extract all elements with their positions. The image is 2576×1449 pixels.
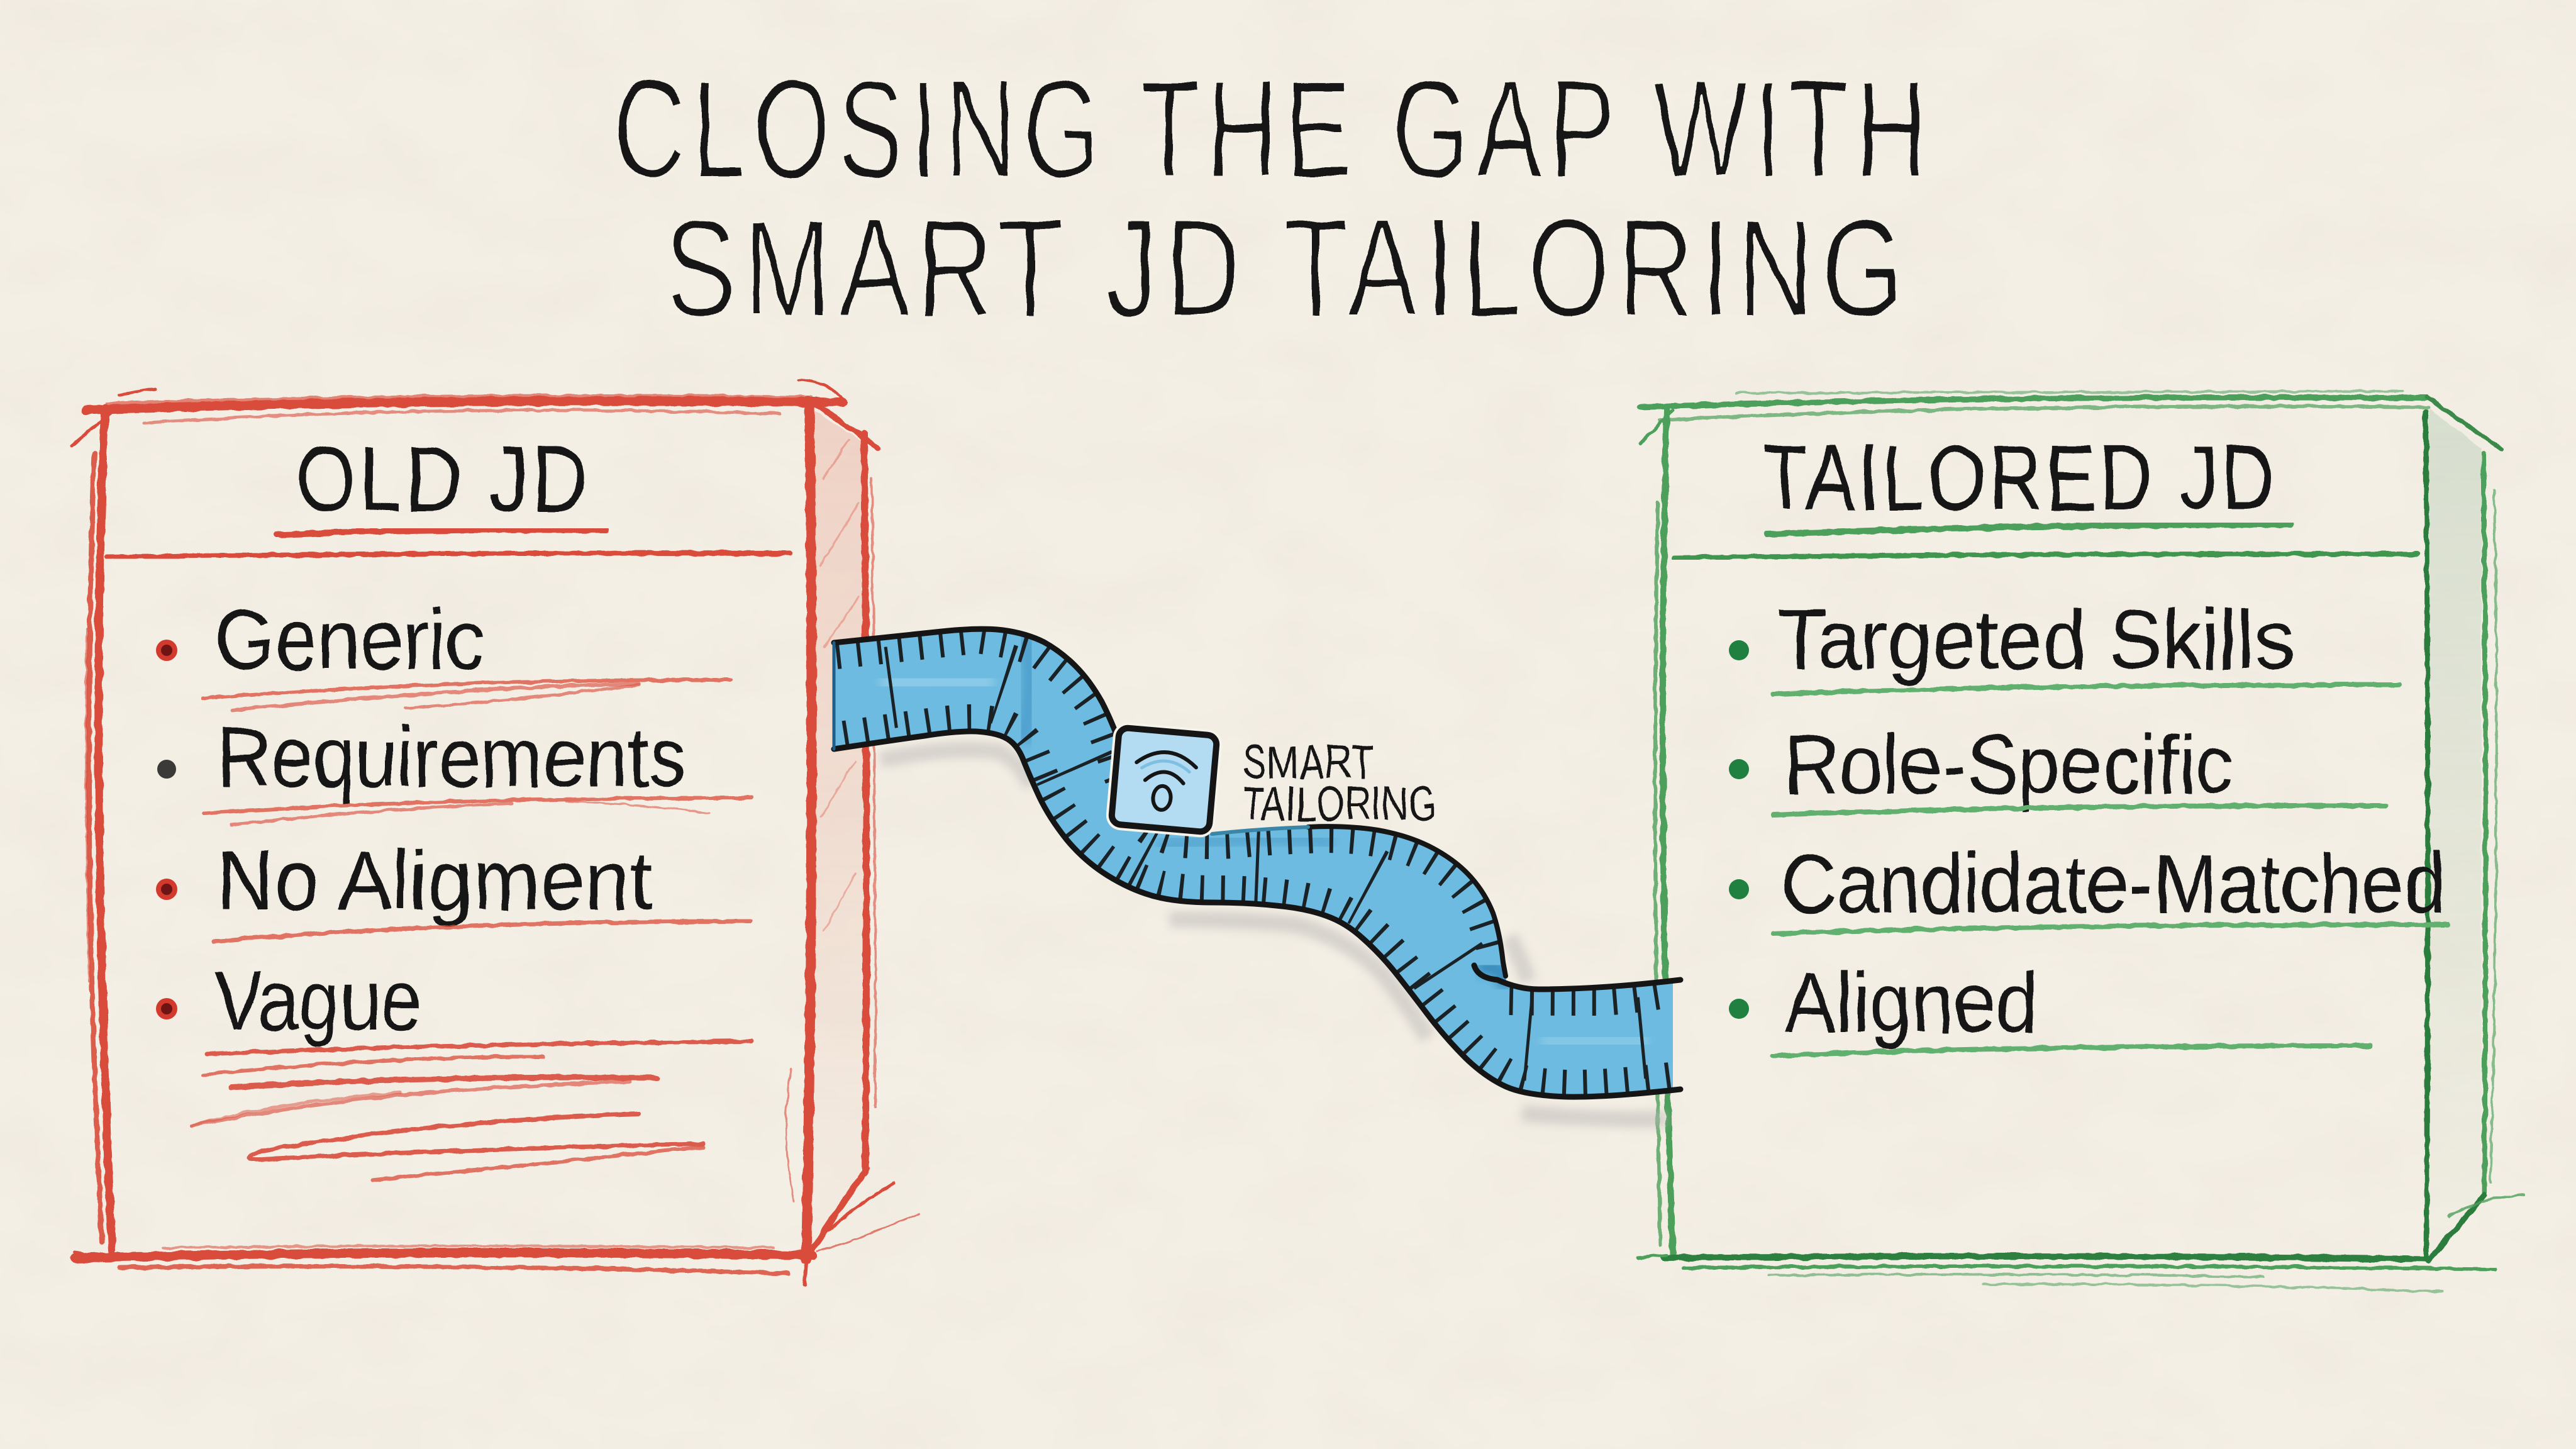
title: SMART JD TAILORING	[665, 190, 1911, 347]
red underlines and scribbles	[192, 680, 752, 1180]
tape measure connector	[834, 629, 1680, 1119]
green underlines	[1773, 685, 2448, 1056]
label: smart tailoring	[1241, 736, 1436, 831]
item: Generic: Generic	[215, 593, 484, 687]
list: old JD items	[156, 593, 686, 1048]
tape shading and ruler ticks	[836, 635, 1673, 1084]
tailored JD box sketch frame	[1638, 391, 2524, 1292]
item: Requirements: Requirements	[216, 711, 686, 804]
label: smart tailoring: TAILORING	[1241, 777, 1436, 831]
item: Candidate-Matched: Candidate-Matched	[1782, 837, 2446, 931]
heading: tailored JD: TAILORED JD	[1762, 426, 2278, 530]
tape body	[834, 629, 1673, 1097]
infographic canvas	[70, 79, 2526, 1294]
item: Aligned: Aligned	[1785, 956, 2038, 1050]
icon: smart tailoring wifi badge	[1105, 721, 1223, 838]
item: Role-Specific: Role-Specific	[1785, 718, 2233, 812]
label: smart tailoring: SMART	[1241, 736, 1375, 789]
item: Vague: Vague	[214, 954, 422, 1048]
item: No Aligment: No Aligment	[216, 834, 652, 928]
tape outline	[834, 629, 1680, 1097]
heading underline and divider	[1674, 525, 2417, 558]
title	[613, 51, 1934, 347]
item: Targeted Skills: Targeted Skills	[1777, 593, 2294, 687]
panel: tailored JD	[1638, 391, 2524, 1292]
list: tailored JD items	[1729, 593, 2446, 1050]
title: CLOSING THE GAP WITH	[613, 51, 1934, 208]
old JD box sketch frame	[71, 380, 919, 1285]
panel: old JD	[71, 380, 919, 1285]
heading: old JD: OLD JD	[296, 428, 591, 531]
tape shadow	[880, 750, 1667, 1119]
heading underline and divider	[108, 530, 790, 557]
